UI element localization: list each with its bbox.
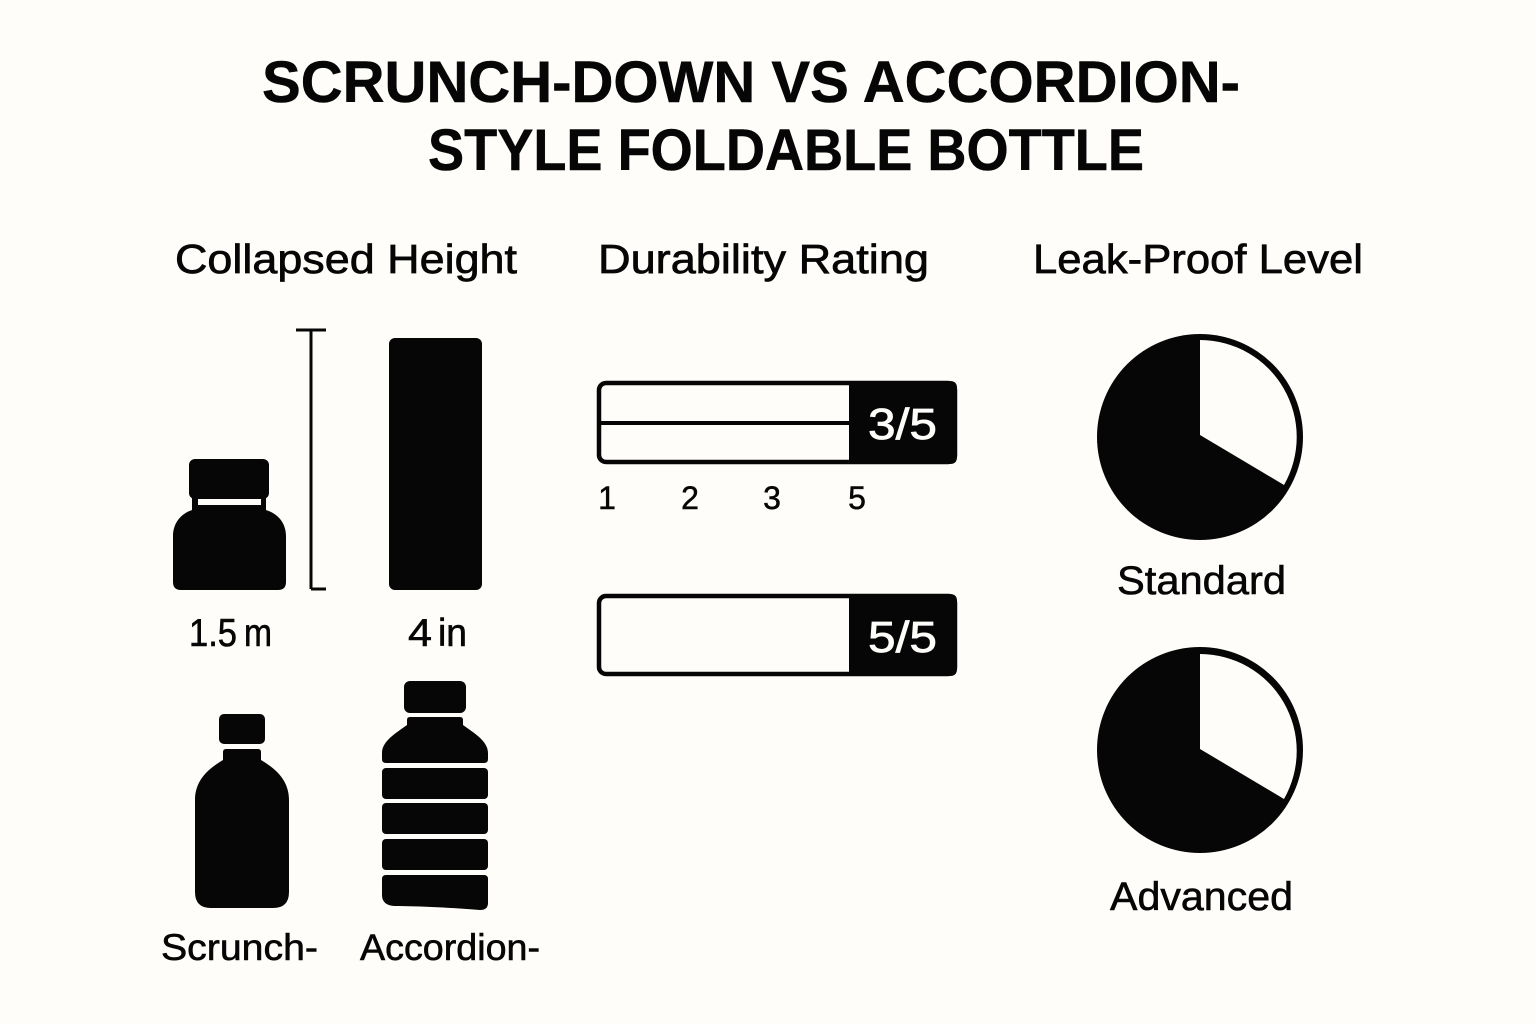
label: 1.5 m: 1.5	[189, 612, 237, 655]
bar: accordion 5/5	[599, 594, 957, 676]
scale labels: 3	[763, 480, 781, 516]
heading: durability rating: Durability Rating	[598, 236, 929, 282]
label: 1.5 m: m	[244, 612, 272, 655]
panel: leak-proof level	[1033, 236, 1363, 919]
scale labels: 5	[848, 480, 866, 516]
title: STYLE FOLDABLE BOTTLE	[428, 118, 1144, 183]
label: advanced: Advanced	[1110, 875, 1293, 919]
scale labels	[598, 480, 866, 516]
label: 4 in: in	[438, 612, 467, 655]
label: 4 in	[408, 612, 467, 655]
title	[262, 50, 1240, 183]
label: scrunch: Scrunch-	[161, 927, 318, 968]
panel: durability rating	[598, 236, 957, 676]
bar: accordion 5/5: 5/5	[868, 613, 937, 662]
pie chart: standard	[1097, 334, 1303, 540]
icon: collapsed accordion block	[389, 338, 482, 590]
icon: collapsed scrunch bottle	[173, 459, 286, 590]
pie chart: advanced	[1097, 647, 1303, 853]
icon: accordion bottle	[382, 681, 488, 910]
label: 1.5 m	[189, 612, 272, 655]
heading: leak-proof level: Leak-Proof Level	[1033, 236, 1363, 282]
label: 4 in: 4	[408, 612, 432, 655]
icon: scrunch bottle	[195, 714, 289, 908]
scale labels: 2	[681, 480, 699, 516]
panel: collapsed height	[161, 236, 540, 968]
scale labels: 1	[598, 480, 616, 516]
bar: scrunch 3/5: 3/5	[868, 400, 937, 449]
label: accordion: Accordion-	[360, 927, 540, 968]
bar: scrunch 3/5	[599, 381, 957, 464]
title: SCRUNCH-DOWN VS ACCORDION-	[262, 50, 1240, 115]
label: standard: Standard	[1117, 559, 1286, 603]
height bracket	[296, 330, 326, 589]
heading: collapsed height: Collapsed Height	[175, 236, 518, 282]
